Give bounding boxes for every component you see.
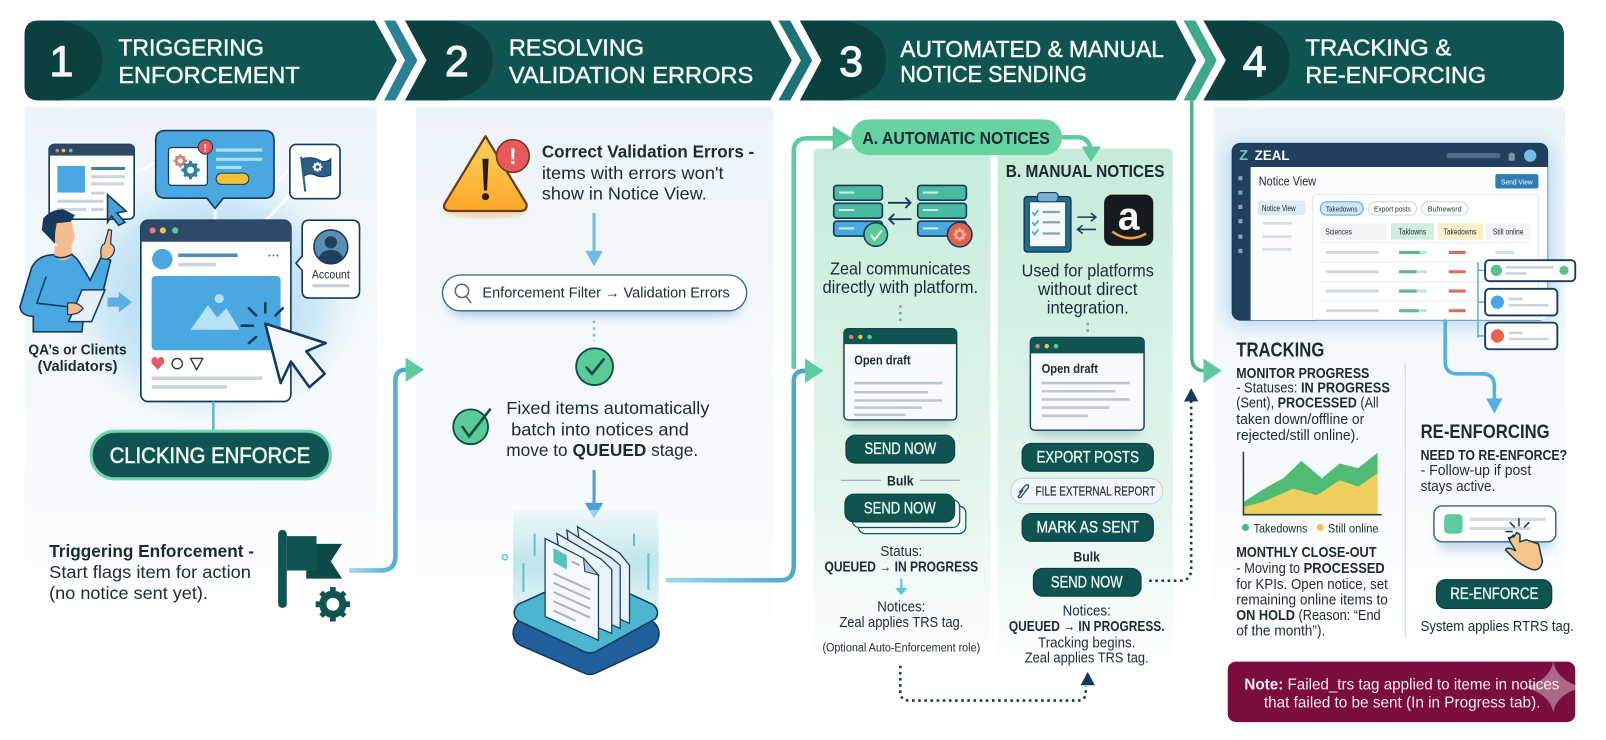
dotted connector (593, 321, 595, 341)
dotted arrow: send now to tracking (1149, 388, 1198, 581)
icon: warning triangle (444, 136, 529, 218)
dashboard: Bufnewsrd (1428, 205, 1462, 214)
button: file external report (1011, 478, 1163, 504)
header: step 4 chevron (1203, 20, 1564, 100)
text: status A: Status: (880, 544, 922, 560)
arrow: to manual notices (1062, 137, 1101, 162)
label: bulk A: Bulk (887, 472, 914, 488)
divider (1405, 364, 1406, 637)
icon: document stack on platform (502, 510, 659, 674)
button: send now A: SEND NOW (864, 440, 937, 458)
button: send now A (846, 435, 955, 463)
icon: clipboard and amazon: a (1118, 195, 1140, 238)
document sheets (577, 527, 629, 623)
text: notices B: QUEUED → IN PROGRESS. (1009, 619, 1165, 635)
text: zeal communicates (822, 258, 978, 297)
panel 2: resolving validation errors (442, 136, 754, 674)
button: export posts (1022, 443, 1153, 471)
icon: warning triangle: ! (509, 144, 517, 169)
text: triggering enforcement: (no notice sent yet). (49, 583, 208, 603)
panel 1: enforcement illustration (20, 131, 364, 621)
dotted arrow: automatic to manual (900, 666, 1095, 701)
text: need to re-enforce: NEED TO RE-ENFORCE? (1421, 448, 1567, 464)
window: open draft A: Open draft (854, 353, 911, 368)
text: correct validation errors: Correct Validation Errors - (542, 142, 754, 162)
window: open draft A (844, 329, 957, 424)
header: step 3 number disc (800, 20, 886, 100)
dashboard: Taklowns (1399, 228, 1426, 237)
header: step 2 chevron (405, 20, 792, 100)
arrow: to automatic notices (794, 126, 852, 369)
text: zeal communicates: directly with platform. (822, 277, 978, 297)
area chart (1242, 452, 1382, 536)
lower platform (513, 621, 659, 674)
faint network lines (134, 162, 297, 220)
arrow: tracking to re-enforcing (1445, 320, 1503, 414)
text: status A (825, 544, 978, 576)
text: triggering enforcement (49, 541, 254, 603)
button: export posts: EXPORT POSTS (1037, 448, 1139, 466)
dashboard: Z (1239, 148, 1248, 164)
label: validators: (Validators) (38, 359, 118, 375)
text: need to re-enforce (1421, 448, 1567, 495)
header: title 1: TRIGGERING (118, 34, 264, 60)
dotted connectors (900, 305, 1088, 334)
dashboard: Still online (1493, 228, 1524, 237)
text: triggering enforcement: Start flags item for action (49, 562, 251, 582)
search pill (442, 275, 747, 315)
text: fixed items: Fixed items automatically (506, 398, 710, 418)
text: notices A: Zeal applies TRS tag. (839, 615, 963, 631)
icon: small cursor (108, 195, 126, 225)
notification bubble (156, 131, 274, 208)
header: title 3 (900, 36, 1164, 87)
chart legend (1242, 522, 1379, 536)
text: notices A: Notices: (877, 599, 925, 615)
heading: tracking: TRACKING (1236, 338, 1324, 361)
dashboard: Send View (1501, 177, 1533, 186)
header: title 2: RESOLVING (509, 34, 644, 60)
text: correct validation errors: show in Notice View. (542, 184, 707, 204)
icon: green check 2 (453, 409, 491, 444)
button: send now B: SEND NOW (1051, 573, 1123, 591)
callout: red status (1485, 323, 1557, 349)
icon: red badge: ! (203, 143, 207, 155)
header banner (25, 20, 1564, 100)
chart legend: Takedowns (1254, 522, 1307, 536)
label: bulk A (841, 472, 960, 488)
arrow: status down (895, 579, 907, 595)
label: bulk B: Bulk (1073, 548, 1100, 564)
text: monthly close-out: ON HOLD (Reason: “End (1236, 608, 1381, 624)
header: connector stripe 3 (1183, 20, 1217, 100)
heading: re-enforcing: RE-ENFORCING (1421, 422, 1550, 443)
small browser window (49, 144, 134, 225)
text: monthly close-out: of the month”). (1236, 624, 1325, 640)
flag card (290, 144, 340, 199)
text: notices B: Zeal applies TRS tag. (1025, 651, 1149, 667)
icon: green check (576, 348, 613, 385)
button: file external report: FILE EXTERNAL REPORT (1035, 484, 1155, 499)
window: open draft B (1030, 337, 1144, 435)
header: step 3 chevron (800, 20, 1196, 100)
dashboard: Notice View (1259, 173, 1317, 188)
icon: heart, comment, send (151, 357, 203, 370)
arrow down 2 (585, 470, 603, 518)
text: notices B (1009, 604, 1165, 667)
header: title 4: TRACKING & (1305, 34, 1452, 60)
text: fixed items: move to QUEUED stage. (506, 440, 698, 460)
text: system applies: System applies RTRS tag. (1421, 619, 1574, 635)
card with hand click (1434, 506, 1556, 570)
connector: step 1 to step 2 (349, 357, 424, 570)
callout: green status (1485, 260, 1575, 281)
text: status A: QUEUED → IN PROGRESS (825, 560, 978, 576)
header: step 2 number disc (405, 20, 493, 100)
callout: blue status (1485, 289, 1557, 315)
text: need to re-enforce: - Follow-up if post (1421, 463, 1531, 479)
dashboard (1229, 143, 1551, 324)
heading: manual notices: B. MANUAL NOTICES (1006, 161, 1165, 181)
dashboard: Notice View (1262, 204, 1296, 213)
button: clicking enforce (91, 431, 330, 479)
note box: Note: Failed_trs tag applied to iteme in notices (1244, 676, 1560, 693)
header: title 4 (1305, 34, 1486, 88)
text: notices B: Notices: (1063, 604, 1111, 620)
upper platform (514, 574, 657, 653)
icon: big cursor with click rays (242, 303, 326, 387)
text: monitor progress (1236, 366, 1390, 444)
column A (814, 149, 990, 666)
button: mark as sent: MARK AS SENT (1037, 519, 1139, 537)
icon: clipboard and amazon (1024, 193, 1153, 252)
panel 4: tracking and re-enforcing (1228, 143, 1581, 722)
header: connector stripe 1 (384, 20, 417, 100)
dashboard: Takedowns (1326, 205, 1358, 214)
status callouts (1478, 260, 1575, 349)
panel: step 4 background (1214, 107, 1565, 665)
label: validators: QA’s or Clients (28, 342, 127, 358)
text: notices A: (Optional Auto-Enforcement role) (822, 640, 980, 654)
search pill: Enforcement Filter → Validation Errors (482, 286, 730, 302)
dashboard: ZEAL (1255, 147, 1290, 163)
header: number 4: 4 (1243, 38, 1267, 86)
header: title 4: RE-ENFORCING (1305, 62, 1486, 88)
text: monitor progress: (Sent), PROCESSED (All (1236, 396, 1379, 412)
text: used for platforms: Used for platforms (1022, 261, 1154, 281)
connector: step 2 to step 3 (666, 358, 823, 580)
dashboard: Sciences (1325, 228, 1352, 237)
text: fixed items (506, 398, 710, 460)
text: notices A (822, 599, 980, 654)
header: number 1: 1 (50, 38, 73, 86)
account card (296, 220, 360, 298)
text: monitor progress: rejected/still online). (1236, 428, 1359, 444)
text: correct validation errors: items with errors won't (542, 163, 724, 183)
header: step 4 number disc (1203, 20, 1290, 100)
text: triggering enforcement: Triggering Enforcement - (49, 541, 254, 561)
icon: mountains (191, 305, 240, 330)
text: monthly close-out (1236, 545, 1388, 640)
window: open draft B: Open draft (1042, 361, 1098, 376)
panel: step 1 background (25, 107, 377, 665)
dashboard: Takedowns (1444, 228, 1476, 237)
header: title 3: AUTOMATED & MANUAL (900, 36, 1164, 62)
icon: servers exchanging (834, 185, 972, 247)
arrow: person to window (108, 292, 132, 312)
header: step 1 chevron (25, 20, 397, 100)
icon: pointing hand (1506, 518, 1542, 570)
text: notices B: Tracking begins. (1038, 635, 1135, 651)
decorative star (1525, 662, 1581, 712)
icon: blue gear (181, 161, 200, 179)
text: monitor progress: MONITOR PROGRESS (1236, 366, 1369, 382)
button: bulk send now A (845, 494, 966, 534)
header: number 2: 2 (445, 38, 469, 86)
browser post window (141, 220, 291, 401)
panel: step 2 background (416, 107, 773, 680)
note box (1228, 662, 1581, 722)
text: monitor progress: - Statuses: IN PROGRESS (1236, 380, 1390, 396)
dashboard: Export posts (1374, 205, 1411, 214)
chart legend: Still online (1328, 522, 1379, 536)
header: title 2 (509, 34, 753, 88)
text: monthly close-out: remaining online items to (1236, 592, 1388, 608)
label: validators (28, 342, 127, 375)
button: send now B (1033, 568, 1141, 596)
person: QA validator (20, 209, 114, 332)
arrowhead (406, 357, 424, 382)
text: need to re-enforce: stays active. (1421, 479, 1495, 495)
header: step 1 number disc (25, 20, 102, 100)
header: title 1 (118, 34, 300, 88)
pill: automatic notices (851, 119, 1062, 155)
panel 3: green columns (666, 119, 1198, 701)
header: number 3: 3 (839, 38, 863, 86)
text: used for platforms: without direct (1037, 279, 1138, 299)
connector: step 3 to step 4 (1157, 100, 1222, 383)
account card: Account (312, 269, 350, 282)
button: re-enforce: RE-ENFORCE (1450, 585, 1538, 603)
header: title 1: ENFORCEMENT (118, 62, 300, 88)
text: monthly close-out: MONTHLY CLOSE-OUT (1236, 545, 1377, 561)
icon: orange gear (174, 154, 187, 168)
text: used for platforms: integration. (1047, 297, 1129, 317)
icon: flag with gear (278, 530, 350, 621)
column B (998, 149, 1173, 676)
button: mark as sent (1022, 514, 1153, 541)
text: monthly close-out: - Moving to PROCESSED (1236, 561, 1385, 577)
text: zeal communicates: Zeal communicates (830, 258, 971, 278)
halo behind illustration (56, 164, 364, 430)
header: connector stripe 2 (778, 20, 812, 100)
text: monitor progress: taken down/offline or (1236, 412, 1364, 428)
note box: that failed to be sent (In in Progress tab). (1264, 695, 1540, 712)
button: re-enforce (1436, 580, 1552, 608)
button: clicking enforce: CLICKING ENFORCE (110, 443, 310, 468)
header: title 2: VALIDATION ERRORS (509, 62, 753, 88)
connector to button (212, 401, 215, 431)
text: monthly close-out: for KPIs. Open notice, set (1236, 577, 1388, 593)
pill: automatic notices: A. AUTOMATIC NOTICES (862, 128, 1050, 148)
button: bulk send now A: SEND NOW (864, 500, 936, 518)
text: used for platforms (1022, 261, 1154, 317)
text: fixed items: batch into notices and (511, 419, 689, 439)
header: title 3: NOTICE SENDING (900, 61, 1087, 87)
arrow down (585, 213, 603, 266)
text: correct validation errors (542, 142, 754, 204)
